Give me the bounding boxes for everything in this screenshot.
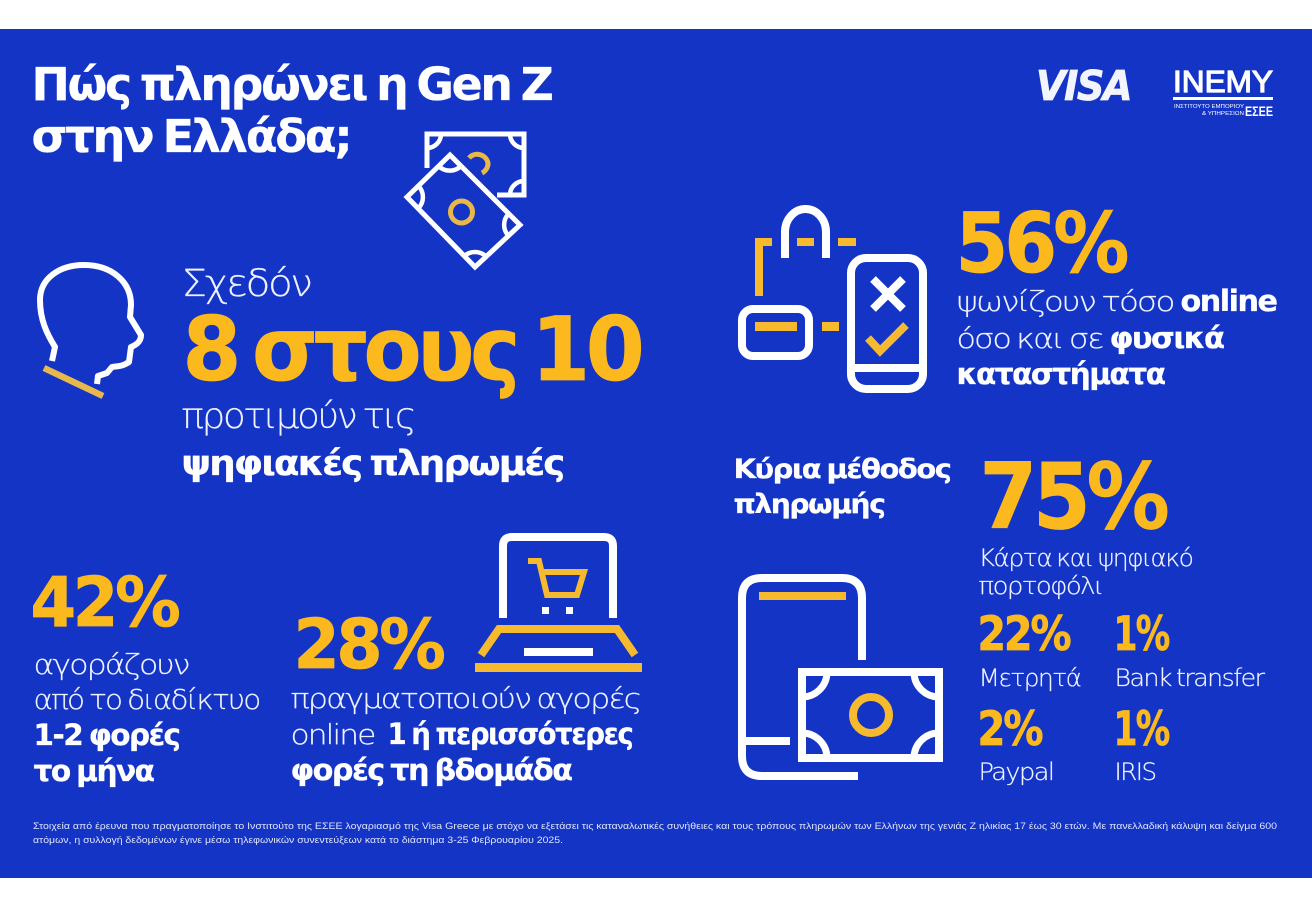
- stat: IRIS 1%: 1%: [1114, 702, 1169, 757]
- stat: nearly 8 in 10: [182, 262, 642, 484]
- footnote: [33, 821, 1277, 846]
- icon: laptop with shopping cart: [475, 537, 642, 672]
- stat: 42%: [30, 563, 260, 788]
- stat: nearly 8 in 10: 8 στους 10: [182, 298, 642, 401]
- logo: INEMY ESEE: ΙΝΣΤΙΤΟΥΤΟ ΕΜΠΟΡΙΟΥ: [1174, 104, 1245, 110]
- stat: cash 22%: Μετρητά: [978, 664, 1081, 692]
- stat: 42%: 1-2 φορές: [34, 718, 180, 752]
- stat: bank transfer 1%: Bank transfer: [1114, 664, 1265, 692]
- heading: main payment method: Κύρια μέθοδος: [734, 454, 951, 485]
- stat: 75%: 75%: [980, 445, 1168, 550]
- stat: 28%: online: [290, 718, 375, 751]
- logo: INEMY ESEE: INEMY: [1173, 64, 1273, 99]
- stat: 42%: από το διαδίκτυο: [34, 683, 260, 716]
- stat: 75%: [978, 445, 1192, 600]
- stat: 75%: πορτοφόλι: [978, 572, 1102, 600]
- stat: 56%: [956, 195, 1277, 391]
- stat: 42%: το μήνα: [34, 754, 154, 788]
- stat: 56%: online: [1180, 284, 1277, 318]
- logo: INEMY ESEE: ΕΣΕΕ: [1245, 103, 1273, 119]
- title: Πώς πληρώνει η Gen Z: [32, 58, 552, 111]
- stat: nearly 8 in 10: προτιμούν τις: [182, 396, 414, 437]
- stat: 56%: φυσικά: [1110, 321, 1224, 355]
- stat: 56%: όσο και σε: [956, 322, 1103, 355]
- stat: nearly 8 in 10: ψηφιακές πληρωμές: [182, 444, 564, 484]
- logo: INEMY ESEE: [1173, 64, 1273, 119]
- stat: cash 22%: 22%: [978, 607, 1071, 662]
- icon: head in profile: [40, 265, 141, 396]
- stat: 28%: πραγματοποιούν αγορές: [290, 682, 640, 715]
- stat: 28%: 1 ή περισσότερες: [388, 717, 633, 751]
- stat: IRIS 1%: IRIS: [1114, 758, 1156, 786]
- stat: 56%: 56%: [956, 195, 1127, 292]
- footnote: ατόμων, η συλλογή δεδομένων έγινε μέσω τηλεφωνικών συνεντεύξεων κατά το διάστημα 3-25 Φεβρουαρίου 2025.: [33, 835, 563, 846]
- stat: Paypal 2%: [978, 702, 1054, 786]
- title: στην Ελλάδα;: [32, 110, 350, 163]
- stat: 42%: αγοράζουν: [34, 648, 189, 681]
- icon: banknotes: [407, 134, 524, 267]
- stat: cash 22%: [978, 607, 1081, 692]
- stat: 28%: [290, 605, 640, 787]
- logo: INEMY ESEE: & ΥΠΗΡΕΣΙΩΝ: [1202, 111, 1244, 117]
- stat: nearly 8 in 10: Σχεδόν: [182, 262, 311, 305]
- footnote: Στοιχεία από έρευνα που πραγματοποίησε το Ινστιτούτο της ΕΣΕΕ λογαριασμό της Visa Greece με στόχο να εξετάσει τις καταναλωτικές συνήθειες και τους τρόπους πληρωμών των Ελλήνων της γενιάς Ζ ηλικίας 17 έως 30 ετών. Με πανελλαδική κάλυψη και δείγμα 600: [33, 821, 1277, 832]
- icon: shopping bag, card and phone: [742, 209, 923, 389]
- stat: Paypal 2%: 2%: [978, 702, 1043, 757]
- stat: IRIS 1%: [1114, 702, 1169, 786]
- stat: 56%: καταστήματα: [956, 357, 1165, 391]
- title: [32, 58, 552, 163]
- stat: 56%: ψωνίζουν τόσο: [956, 285, 1174, 318]
- logo: Visa: VISA: [1036, 62, 1131, 110]
- stat: bank transfer 1%: 1%: [1114, 607, 1169, 662]
- heading: main payment method: [734, 454, 951, 520]
- stat: 28%: 28%: [294, 605, 444, 685]
- stat: 42%: 42%: [30, 563, 179, 643]
- stat: 75%: Κάρτα και ψηφιακό: [978, 544, 1192, 572]
- icon: phone and banknote: [742, 578, 939, 776]
- stat: bank transfer 1%: [1114, 607, 1265, 692]
- heading: main payment method: πληρωμής: [734, 489, 885, 520]
- stat: Paypal 2%: Paypal: [978, 758, 1054, 786]
- stat: 28%: φορές τη βδομάδα: [290, 753, 572, 787]
